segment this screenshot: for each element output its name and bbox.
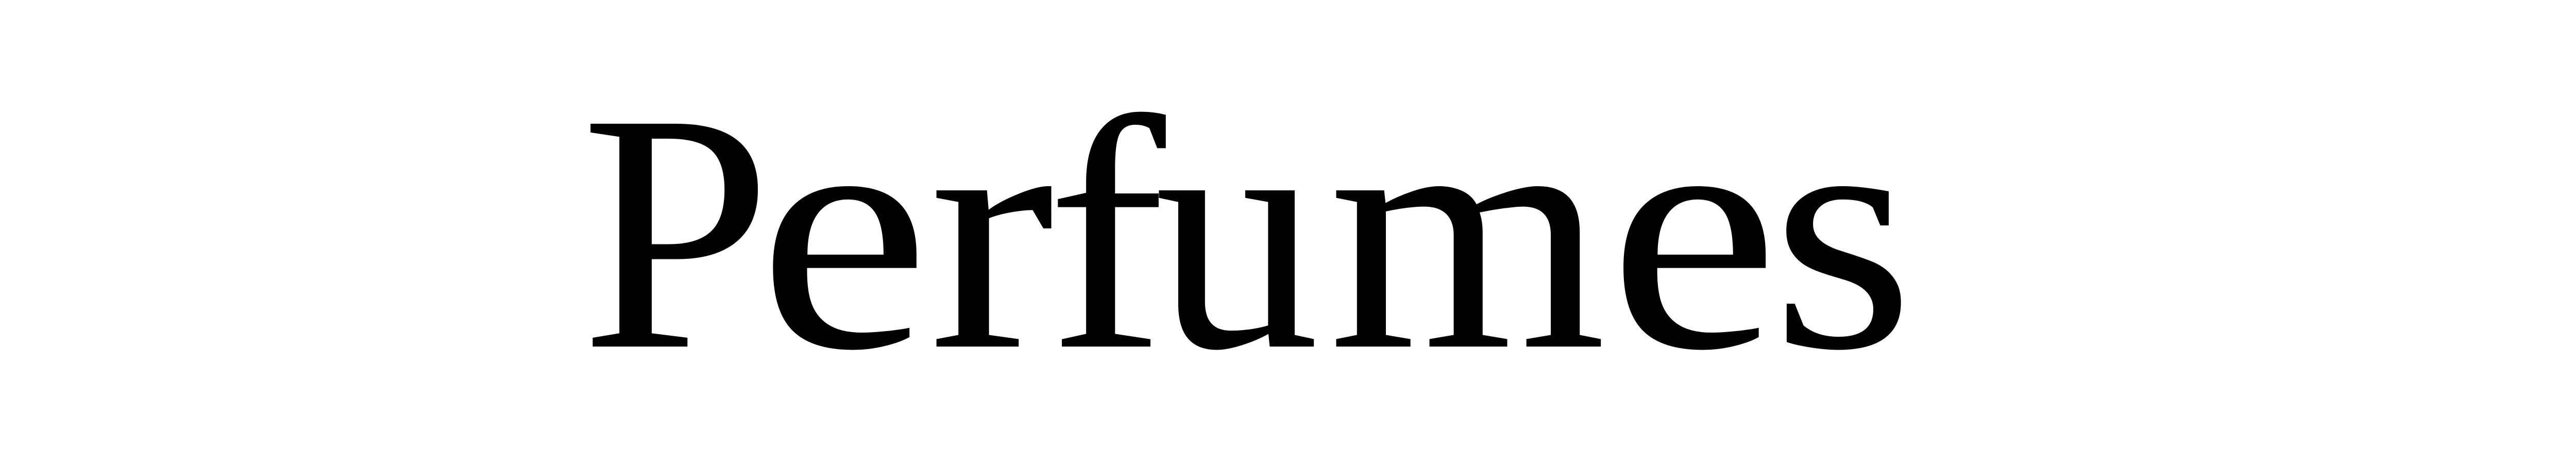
title	[581, 43, 1914, 421]
title: s	[1771, 43, 1914, 420]
title: P	[581, 44, 772, 420]
title: e	[758, 43, 930, 421]
title: e	[1608, 43, 1779, 420]
title: r	[929, 43, 1055, 420]
title: f	[1047, 50, 1170, 419]
title: m	[1329, 44, 1606, 420]
title: u	[1155, 43, 1319, 420]
